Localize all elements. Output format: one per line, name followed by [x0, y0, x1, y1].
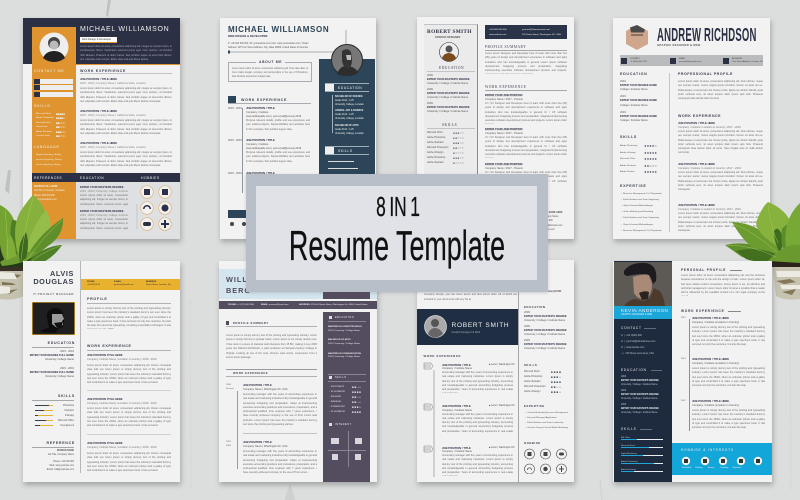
work experience: Lorem ipsum dolor sit amet, consectetur adipiscing elit. Donec consequat vitae felis nec lorem ipsum is simply dummy text of the printing and typesetting industry. Lorem ipsum has been the industry's standard dummy text ever since the 1500s, when an unknown printer took a galley of type and scrambled it to make a type specimen book. It has survived. [87, 364, 171, 384]
work experience: 2012 [681, 317, 686, 319]
job entries: JOB POSITION / TITLE [246, 107, 275, 110]
skills: SKILLS [34, 104, 50, 108]
hexagon portrait [626, 25, 648, 50]
profile summary [226, 321, 317, 359]
education: EDUCATION [621, 368, 647, 372]
portrait [32, 302, 75, 335]
work experience: Company, Institute Name | Location in Country | 2015 - 2019 [87, 358, 156, 360]
education entries: 2015 - 2019 | University, College, Institute [80, 214, 128, 217]
vertical rule [516, 260, 519, 482]
work experience: WORK EXPERIENCE [485, 85, 526, 89]
about me heading: ABOUT ME [259, 60, 282, 64]
name: WILLIAM BERG [226, 274, 264, 294]
education [427, 66, 475, 113]
education sidebar: LIBERAL ART & SCIENCE Grade Point : 4.25 University, College, Location [335, 110, 364, 120]
about me box [228, 62, 312, 82]
work experience: WORK EXPERIENCE [233, 371, 268, 375]
contact bar [485, 24, 567, 39]
education: 2009 ENTER YOUR MASTER'S DEGREE University / College / Institute Name [621, 404, 659, 414]
skills: ★★★★☆ ★★★★★ ★★★★★ ★★☆☆☆ ★★★★★ [644, 144, 657, 174]
work experience: Company / Institute (Location in Country) [692, 362, 739, 365]
name: MICHAEL WILLIAMSON [228, 25, 329, 34]
blue name band: GRAPHIC DESIGNER & WEB [621, 314, 652, 316]
portrait [40, 32, 68, 62]
job entries: 2015 - 2019 [228, 172, 242, 174]
contact bar: CONTACT +1 (000) 000-1171 [630, 58, 647, 63]
education [524, 305, 568, 353]
skills bars [621, 427, 663, 473]
light blue header [219, 269, 377, 299]
reference: PERSON NAME Job Title, Company Name Phone: +00 000 000 Web: www.yoursite.com Email: mail@example.com [47, 450, 74, 471]
contact text: P: +00 000 000 000 | W: yourwebsite.com | Em: www.yourwebsite.com | Twitter Address: 225 Your Street Address, City, State 00000, United States of America [228, 43, 309, 49]
work experience: JOB POSITION / TITLE HERE [80, 78, 117, 81]
education: EDUCATION [620, 72, 647, 76]
professional profile: PROFESSIONAL PROFILE [678, 72, 733, 76]
work experience: JOB POSITION / TITLE HERE [678, 122, 715, 125]
teal sidebar [319, 59, 375, 239]
sidebar education: MASTERS IN COMPUTER ENGG. 2012 | University / College Name [328, 326, 362, 332]
work experience: Lorem Ipsum is simply dummy text of the printing and typesetting industry. Lorem Ipsum has been the industry's standard dummy text ever since the 1500s, when an unknown printer took a galley of type and scrambled it to make a type specimen book. It has survived not only five centuries, but also the leap. [692, 326, 765, 346]
sidebar skills: SKILLS [335, 376, 346, 378]
resume 8: Kevin Anderson [613, 261, 772, 482]
role tag: Web Design & Developer [82, 38, 111, 40]
sidebar education: EDUCATION [335, 316, 354, 318]
skills: Microsoft Word Adobe Photoshop Adobe Illustrator Microsoft Powerpoint Adobe InDesign Adobe Photoshop Adobe Illustrator [427, 132, 448, 164]
contact bar: EMAIL yourmail@example.com [679, 58, 701, 63]
work experience: Company, Institute Name | Location in Country | 2015 - 2019 [87, 402, 156, 404]
education: EDUCATION [524, 305, 545, 309]
reference [32, 441, 75, 471]
contact band: EMAIL: yourmail@mail.com [261, 304, 288, 306]
hobbies [524, 441, 568, 476]
resume 5: Alvis Douglas [23, 261, 180, 482]
skills bars: SKILLS [621, 427, 637, 431]
hobbies: HOBBISE [524, 441, 541, 445]
job entries: ■ Lorem, Washington DC [489, 405, 515, 407]
portrait [424, 315, 446, 338]
role: GRAPHIC DESIGNER [435, 36, 460, 38]
resume 2: teal timeline [220, 18, 376, 239]
work experience: Lorem ipsum dolor sit amet, consectetur adipiscing elit. Donec consequat vitae felis nec lorem ipsum is simply dummy text of the printing and typesetting industry. Lorem ipsum has been the industry's standard dummy text ever since the 1500s, when an unknown printer took a galley of type and scrambled it to make a type specimen book. It has survived. [87, 407, 171, 427]
name: MICHAEL WILLIAMSON [80, 26, 169, 33]
contact rows [34, 79, 73, 97]
work experience: Lorem ipsum dolor sit amet, consectetur adipiscing elit. Integer ac semper lorem, in condimentum libero. Vestibulum euismod purus eget nunc pretium, at tincidunt nibh aliquam. Praesent ut dolor massa. Sed porttitor augue sit amet felis dictum, nec vulputate enim tempor. Etiam vitae erat quis libero lacinia consequat. [80, 151, 172, 167]
skills [32, 394, 75, 427]
professional profile: Lorem ipsum dolor sit amet, consectetur adipiscing elit. Duis ultrices, neque nec semper auctor, metus magna ipsum tincidunt. Donec sit amet elit eu. Pellentesque et accumsan dui. Donec porta, ligula nec dictum blandit, justo tortor vehicula sem, sit amet tempus diam ipsum quis felis. Praesent consequat vitae lacinia dolor sit amet. [678, 80, 763, 100]
skills [427, 123, 475, 165]
work experience: Lorem ipsum dolor sit amet, consectetur adipiscing elit. Duis ultrices, neque nec semper auctor, metus magna ipsum tincidunt. Donec sit amet elit eu. Pellentesque et accumsan dui. Donec porta, ligula nec dictum blandit, justo tortor vehicula sem, sit amet tempus diam ipsum quis felis. Praesent consequat. [678, 212, 763, 232]
purple tab [323, 289, 370, 298]
work experience: JOB POSITION / TITLE HERE [678, 163, 715, 166]
connector lines [228, 30, 346, 54]
orange sidebar [32, 27, 76, 173]
sidebar interests: INTEREST [335, 422, 351, 426]
job entries: Propose relevant details, profile and use experience and your related projects. Responsibilities and activities here in this company. Sed porttitor augue vitae. [246, 119, 310, 131]
work experience: JOB POSITION TITLE HERE [87, 354, 123, 356]
sidebar education: MASTERS IN COMMUNICATION 2012 | University / College Name [328, 352, 361, 358]
education: EDUCATION [439, 66, 464, 70]
heading: Resume Template: Resume Template [289, 222, 505, 269]
work experience: 2015 - 2019 | Company Name | California State, Location [80, 114, 146, 117]
education: 2009 ENTER YOUR MASTER'S DEGREE University / College / Institute Name [427, 74, 470, 85]
profile: PROFILE [87, 297, 107, 301]
work experience: Company / Institute (Location in Country) [692, 404, 739, 407]
expertise [524, 404, 568, 434]
work experience: Company / Institute / Location in Country | 2017 - 2019 [678, 126, 741, 128]
education entries: 2015 - 2019 | University, College, Institute [80, 190, 128, 193]
personal profile: PERSONAL PROFILE [681, 268, 726, 272]
yellow contact bar [81, 278, 180, 290]
job entries: JOB POSITION / TITLE [246, 139, 275, 142]
role: IT PROJECT MANAGER [33, 292, 74, 296]
skills: ●●●○○ ●●○○○ ●●●○○ ●●○○○ ●○○○○ ●●●○○ ●○○○○ [453, 131, 464, 165]
yellow contact bar: E-MAIL yourmail@email.com [114, 281, 133, 286]
work experience: JOB POSITION / TITLE HERE [692, 317, 729, 320]
work experience: Lorem ipsum dolor sit amet, consectetur adipiscing elit. Duis ultrices, neque nec semper auctor, metus magna ipsum tincidunt. Donec sit amet elit eu. Pellentesque et accumsan dui. Donec porta, ligula nec dictum blandit, justo tortor vehicula sem, sit amet tempus diam ipsum quis felis. Praesent consequat. [678, 171, 763, 191]
education: 2009 ENTER YOUR MASTER'S DEGREE University / College / Institute Name [524, 339, 567, 350]
contact bar: yourmail@domainname.com 225 Street Name, Washington DC, USA [522, 28, 561, 36]
work experience: Company, Institute Name | Location in Country | 2015 - 2019 [87, 446, 156, 449]
hobby icons [136, 185, 172, 231]
work experience: WORK EXPERIENCE [80, 69, 126, 73]
orange accent line [76, 64, 180, 65]
intro text: Lorem ipsum dolor sit amet, you do the best services with Lorem ipsum placed. Company Design, you can lorem ipsum and also ipsum dolor. All of which are included in your documents with any file at [424, 289, 517, 301]
work experience [226, 369, 317, 474]
work experience: JOB POSITION TITLE HERE [87, 398, 123, 400]
education: 2019 ENTER YOUR DEGREE NAME College / Institute Name [620, 80, 657, 91]
skills sidebar [325, 146, 369, 169]
job entries: 2015 - 2019 [228, 139, 242, 142]
language: LANGUAGE [34, 145, 60, 149]
work experience: Lorem Ipsum is simply dummy text of the printing and typesetting industry. Lorem Ipsum has been the industry's standard dummy text ever since the 1500s, when an unknown printer took a galley of type and scrambled it to make a type specimen book. It has survived not only five centuries, but also the leap. [692, 367, 765, 387]
section band: HOBBIES [141, 176, 160, 180]
left potted plant [0, 195, 64, 300]
name: ALVIS DOUGLAS [33, 269, 74, 286]
section band: EDUCATION [80, 176, 104, 180]
work experience: JOB POSITION / TITLE HERE [80, 142, 117, 145]
skills: Microsoft Word Adobe Photoshop Microsoft Excel PowerPoint Adobe Illustrator Creative Suite [36, 112, 53, 137]
skills [620, 135, 657, 174]
timeline [241, 108, 244, 193]
skills: Microsoft Word Adobe Photoshop Adobe Illustrator Microsoft Powerpoint Adobe InDesign [524, 371, 545, 393]
blue name band [614, 306, 672, 319]
education sidebar [325, 83, 369, 134]
work experience [485, 85, 567, 187]
section band: REFERENCES [34, 176, 62, 180]
hobby icons [230, 222, 246, 226]
work experience: 2012 2016 [226, 441, 231, 447]
expertise: • Resource Management / IoT Reputation • Public Relation and Team Supporting • Object-Oriented Methodologies • Online Marketing and Branding • Public Relation and Team Supporting • Object-Oriented Methodologies • Resource Management / IoT Reputation [621, 192, 662, 232]
profile summary: Lorem ipsum is simply dummy text of the printing and typesetting industry. Lorem Ipsum is simply Dummy is popular belief, Lorem ipsum is not simply random text. It has roots in a piece of classical Latin literature from 45 BC, making it over 2000 years old. Richard McClintock, a Latin professor at Hampden-Sydney College in Virginia. Looking up one of the more obscure Latin words, consectetur, from a Lorem ipsum passage. [226, 334, 317, 359]
work experience heading: WORK EXPERIENCE [424, 354, 461, 358]
education: 2009 ENTER YOUR MASTER'S DEGREE University / College / Institute Name [524, 325, 567, 336]
role: WEB DESIGN & DEVELOPER [228, 34, 268, 38]
about me box: Lorem ipsum dolor sit amet, consectetur adipiscing elit. Duis vitae diam ut risus mattis feugiat, company and partnerships in the use of Photoshop. Sed tincidunt elementum magna vitae. [232, 68, 308, 78]
work experience: Lorem Ipsum is simply dummy text of the printing and typesetting industry. Lorem Ipsum has been the industry's standard dummy text ever since the 1500s, when an unknown printer took a galley of type and scrambled it to make a type specimen book. It has survived not only five centuries, but also the leap. [692, 409, 765, 429]
sidebar education [328, 316, 366, 358]
education [30, 341, 75, 378]
education: 2009 ENTER YOUR MASTER'S DEGREE University / College / Institute Name [427, 88, 470, 99]
expertise: EXPERTISE [620, 184, 646, 188]
work experience heading [228, 96, 311, 104]
name: ROBERT SMITH [427, 29, 472, 35]
contact: CONTACT [621, 326, 642, 330]
education: 2015 - 2019 ENTER YOUR DEGREE FULL NAME University, College Name [30, 367, 74, 378]
role: Graphic Designer & Web [452, 331, 480, 334]
job entries: ■ Lorem, Washington DC [489, 364, 515, 366]
skills bars: MS Office Microsoft Excel Digital Marketing Adobe Photoshop Adobe Illustrator [621, 437, 638, 471]
expertise: EXPERTISE [524, 404, 545, 408]
education sidebar: BACHELOR OF ARTS Grade Point : 4.25 University, College, Location [335, 124, 364, 134]
education entries [80, 186, 128, 231]
skills [34, 104, 66, 138]
sidebar interests [328, 421, 368, 477]
work experience: JOB POSITION / TITLE [243, 441, 272, 444]
work experience: Lorem ipsum dolor sit amet, consectetur adipiscing elit. Integer ac semper lorem, in condimentum libero. Vestibulum euismod purus eget nunc pretium, at tincidunt nibh aliquam. Praesent ut dolor massa. Sed porttitor augue sit amet felis dictum, nec vulputate enim tempor. Etiam vitae erat quis libero lacinia consequat. [80, 119, 172, 135]
job entries: Company / Institute www.skillsquality.com | your.email@county.2016 [246, 143, 301, 150]
vertical rule [80, 261, 81, 473]
education: EDUCATION [48, 341, 75, 345]
expertise: • Content Marketing Resource Management • Personal Managed Application • Public Relation and Team Leadership • Creative Design & Social Media Marketing [525, 412, 568, 429]
work experience: Lorem ipsum dolor sit amet, consectetur adipiscing elit. Donec consequat vitae felis nec lorem ipsum is simply dummy text of the printing and typesetting industry. Lorem ipsum has been the industry's standard dummy text ever since the 1500s, when an unknown printer took a galley of type and scrambled it to make a type specimen book. It has survived. [87, 452, 171, 472]
work experience: ENTER YOUR JOB POSITION [485, 128, 522, 131]
work experience: JOB POSITION / TITLE HERE [692, 400, 729, 403]
vertical divider [668, 73, 671, 232]
work experience heading: WORK EXPERIENCE [241, 98, 287, 102]
name: ROBERT SMITH [452, 322, 509, 329]
inner panel [256, 186, 537, 280]
education: 2019 ENTER YOUR DEGREE NAME College / Institute Name [620, 95, 657, 107]
navy sidebar [614, 261, 672, 482]
yellow contact bar: ADDRESS Street Name, Location, Zip [146, 281, 171, 286]
job entries: JOB POSITION / TITLE [442, 405, 471, 408]
resume 6: purple sidebar [219, 261, 377, 482]
job entries: JOB POSITION / TITLE [442, 364, 471, 366]
portrait [614, 262, 672, 306]
sidebar skills [328, 374, 366, 414]
role tag [80, 36, 117, 42]
work experience: Company Name | Washington Dr. USA [243, 444, 288, 448]
skills sidebar: SKILLS [338, 148, 352, 152]
job entries: JOB POSITION / TITLE [442, 446, 471, 450]
language [34, 145, 62, 166]
contact band: PHONE: +1 (123) 567-890 [228, 304, 254, 306]
job entries: Company / Institute Name [442, 408, 472, 412]
sidebar skills: - PHOTOSHOP - ILLUSTRATOR - MS WORD - INDESIGN - POWERPOINT - ILLUSTRATOR [329, 386, 345, 412]
job entries: Propose relevant details, profile and use experience and your related projects. Responsibilities and activities here in this company. Sed porttitor augue vitae. [246, 151, 310, 163]
education: 2009 ENTER YOUR MASTER'S DEGREE University / College / Institute Name [621, 376, 659, 386]
work experience: 2015 - 2019 | Company Name | California State, Location [80, 82, 146, 85]
work experience: Company Name / 2017 - Present [485, 167, 523, 170]
education: 2009 ENTER YOUR MASTER'S DEGREE University / College / Institute Name [621, 390, 659, 400]
work experience [80, 69, 172, 167]
purple sidebar [323, 312, 370, 482]
education: 2019 ENTER YOUR DEGREE NAME College / Institute Name [620, 110, 657, 122]
name: ANDREW RICHDSON [656, 25, 756, 45]
contact band [219, 301, 377, 309]
resume 4: Andrew Richdson [613, 18, 770, 239]
work experience: 2012 [681, 358, 686, 360]
contact bar [620, 55, 763, 66]
work experience: WORK EXPERIENCE [681, 309, 725, 313]
work experience: Lorem ipsum dolor sit amet, consectetur adipiscing elit. Integer ac semper lorem, in condimentum libero. Vestibulum euismod purus eget nunc pretium, at tincidunt nibh aliquam. Praesent ut dolor massa. Sed porttitor augue sit amet felis dictum, nec vulputate enim tempor. Etiam vitae erat quis libero lacinia consequat. [80, 87, 172, 103]
portrait [331, 44, 363, 76]
work experience: Company / Institute / Location in Country | 2017 - 2019 [678, 208, 741, 210]
job entries: Company / Institute www.skillsquality.com | your.email@county.2016 [246, 111, 301, 118]
lower grey panel [76, 173, 180, 239]
sidebar education: BACHELOR OF ARTS 2012 | University / College Name [328, 339, 360, 345]
job entries: Company / Institute Name [442, 367, 472, 370]
header band [23, 18, 180, 64]
resume 1: orange and navy [23, 18, 180, 239]
job entries [228, 107, 310, 174]
education [620, 72, 657, 122]
work experience [87, 344, 171, 472]
skills: SKILLS [620, 135, 637, 139]
skills: Photoshop Illustrator InDesign Microsoft Office Development [58, 405, 74, 427]
job entries: Company / Institute Name [442, 450, 472, 453]
reference: PERSON FULL NAME HERE Job Title, Company Name Phone: 000 000 000 Email: yourmail@domain.com www.yourwebsite.com [532, 212, 563, 231]
contact bar: +00 0000 000 000 www.website.com [489, 28, 507, 36]
work experience: 2012 [681, 400, 686, 402]
contact heading: CONTACT ME [34, 68, 64, 72]
work experience [678, 114, 763, 232]
intro text: Lorem ipsum dolor sit amet, consectetur adipiscing elit. Integer ac semper lorem, in condimentum libero. Vestibulum euismod purus eget nunc pretium, at tincidunt nibh aliquam. Praesent ut dolor massa. Sed porttitor augue sit amet felis dictum, nec vulputate enim tempor. Etiam vitae erat quis libero lacinia. [80, 45, 172, 61]
job entries: 2015 - 2019 [228, 107, 242, 110]
resume 3: serif with left column [417, 17, 574, 239]
resume 7: navy band Robert Smith [417, 260, 574, 482]
blue name band: KEVIN ANDERSON [621, 308, 668, 312]
contact: ✆ | +00 1(000) 000 ✉ | yourmail@domainname.com ✆ | www.website.com ⌂ | 225 Street name Area, USA [621, 335, 655, 355]
work experience: Company Name / 2017 - Present [485, 98, 523, 101]
timeline [423, 362, 453, 482]
contact band: ADDRESS: 225 Full Street Name, Washington Dr. 4456, United States [299, 304, 368, 306]
job entries: ■ Lorem, Washington DC [489, 446, 515, 448]
job entries [439, 364, 517, 480]
education: 2015 - 2019 ENTER YOUR DEGREE FULL NAME University, College Name [30, 350, 74, 361]
navy band [417, 309, 518, 345]
skills: SKILLS [442, 123, 457, 127]
work experience: Lorem ipsum dolor sit amet, consectetur adipiscing elit. Duis ultrices, neque nec semper auctor, metus magna ipsum tincidunt. Donec sit amet elit eu. Pellentesque et accumsan dui. Donec porta, ligula nec dictum blandit, justo tortor vehicula sem, sit amet tempus diam ipsum quis felis. Praesent consequat vitae lacinia dolor sit amet. Nam feugiat ante at nulla dictum commodo. [678, 130, 763, 154]
work experience: JOB POSITION / TITLE [243, 384, 272, 387]
skills: Adobe Photoshop Adobe InDesign Microsoft Office Adobe Illustrator Adobe Premier [620, 145, 637, 173]
reference: REFERENCE [47, 441, 75, 445]
skills: SKILLS [58, 394, 75, 398]
contact [621, 326, 669, 358]
profile summary: PROFILE SUMMARY [233, 321, 269, 325]
work experience: ENTER YOUR JOB POSITION [485, 94, 522, 97]
right potted plant [725, 202, 800, 300]
right column contact: ■ Www.Yourwebsite.Name@20192 [524, 291, 561, 293]
lower orange panel [32, 182, 76, 239]
hobbies heading [228, 210, 252, 218]
work experience: UI / UX Designer and Developer best of team with more than five (05) years of design and development experience in software and apps industries who has knowledgeable in general UI / UX software development budgeting process. [485, 171, 567, 187]
references text: PERSON FULL NAME Job Title | Company | Location Phone: 000 000 000 www.yourwebsite.com [34, 186, 65, 201]
work experience: 2015 - 2019 | Company Name | California State, Location [80, 146, 146, 149]
work experience: Accounting manager with five years of accounting experience in real estate and marketing industries fully knowledgeable in general accounting budgeting and preparation. Adept at implementing executive accounting practices and procedures, preparation, and a professional qualified. Fine engineer with 7 years experience. I have recently achieved company in the use of Proo Lorem lead products. Lorem Ipsum has been the industry's standard dummy text since the printing and typesetting various. [243, 393, 317, 426]
work experience: Company Name | Washington Dr. USA [243, 388, 288, 390]
job entries: JOB POSITION / TITLE [246, 172, 275, 174]
work experience: JOB POSITION / TITLE HERE [678, 204, 715, 207]
work experience: JOB POSITION / TITLE HERE [692, 358, 729, 361]
language: English Speaking, Writing Spanish Speaking, Writing French Speaking, Writing [36, 154, 62, 166]
yellow contact bar: PHONE +00 000 0123 [87, 281, 100, 286]
education sidebar: EDUCATION [338, 86, 362, 90]
title card [246, 174, 548, 292]
work experience: Accounting manager with five years of accounting experience in real estate and marketing industries fully knowledgeable in general accounting budgeting and preparation. Adept at implementing executive accounting practices and procedures, preparation, and a professional qualified. Fine engineer with 7 years experience. I have recently achieved company in the use of Proo Lorem. [243, 450, 317, 474]
work experience: Company / Institute / Location in Country | 2017 - 2019 [678, 166, 741, 170]
education: 2009 ENTER YOUR MASTER'S DEGREE University / College / Institute Name [524, 311, 567, 322]
work experience: JOB POSITION / TITLE HERE [80, 110, 117, 113]
sidebar skills: ■■□□ ■■■■ ■■□□ ■■□□ ■■■□ ■■■■ [352, 384, 362, 414]
education: 2009 ENTER YOUR MASTER'S DEGREE University / College / Institute Name [427, 102, 470, 113]
section band [32, 173, 180, 182]
work experience: Company / Institute (Location in Country) [692, 321, 739, 324]
work experience [681, 309, 765, 444]
work experience: JOB POSITION TITLE HERE [87, 442, 123, 445]
work experience: 2016 Present [226, 384, 234, 390]
left column frame [424, 24, 478, 195]
profile summary: PROFILE SUMMARY [485, 45, 526, 49]
role: GRAPHIC DESIGNER & WEB [657, 44, 700, 46]
work experience: WORK EXPERIENCE [678, 114, 721, 118]
skills [524, 363, 568, 397]
education entries: ENTER YOUR MASTERS DEGREE [80, 186, 124, 189]
blue hobbies panel [672, 443, 772, 474]
work experience: Company Name / 2017 - Present [485, 132, 523, 135]
skills: ■■■■■ ■■■■□ ■■□□□ ■■□□□ ■■■□□ ■■□□□ [56, 112, 65, 138]
education sidebar: BACHELOR OF SCIENCE Grade Point : 4.25 University, College, Location [335, 96, 364, 106]
contact bar: ADDRESS Your Street Address, Country, US [732, 58, 763, 63]
profile [87, 297, 171, 329]
work experience: ENTER YOUR JOB POSITION [485, 163, 522, 166]
blue hobbies panel: HOBBISE & INTERESTS [681, 448, 734, 452]
blue hobbies panel: Basketball Painting Boxing Traveling Machines [682, 467, 741, 469]
heading: 8 in 1: 8 IN 1 [376, 191, 419, 222]
personal profile [681, 268, 765, 302]
portrait [439, 42, 459, 62]
skills: ■■■■ ■■■□ ■■■■ ■■□□ ■■■□ [551, 370, 562, 394]
education [621, 368, 669, 418]
work experience: WORK EXPERIENCE [87, 344, 132, 348]
education entries: ENTER YOUR MASTERS DEGREE [80, 210, 124, 213]
skills: SKILLS [524, 363, 537, 367]
